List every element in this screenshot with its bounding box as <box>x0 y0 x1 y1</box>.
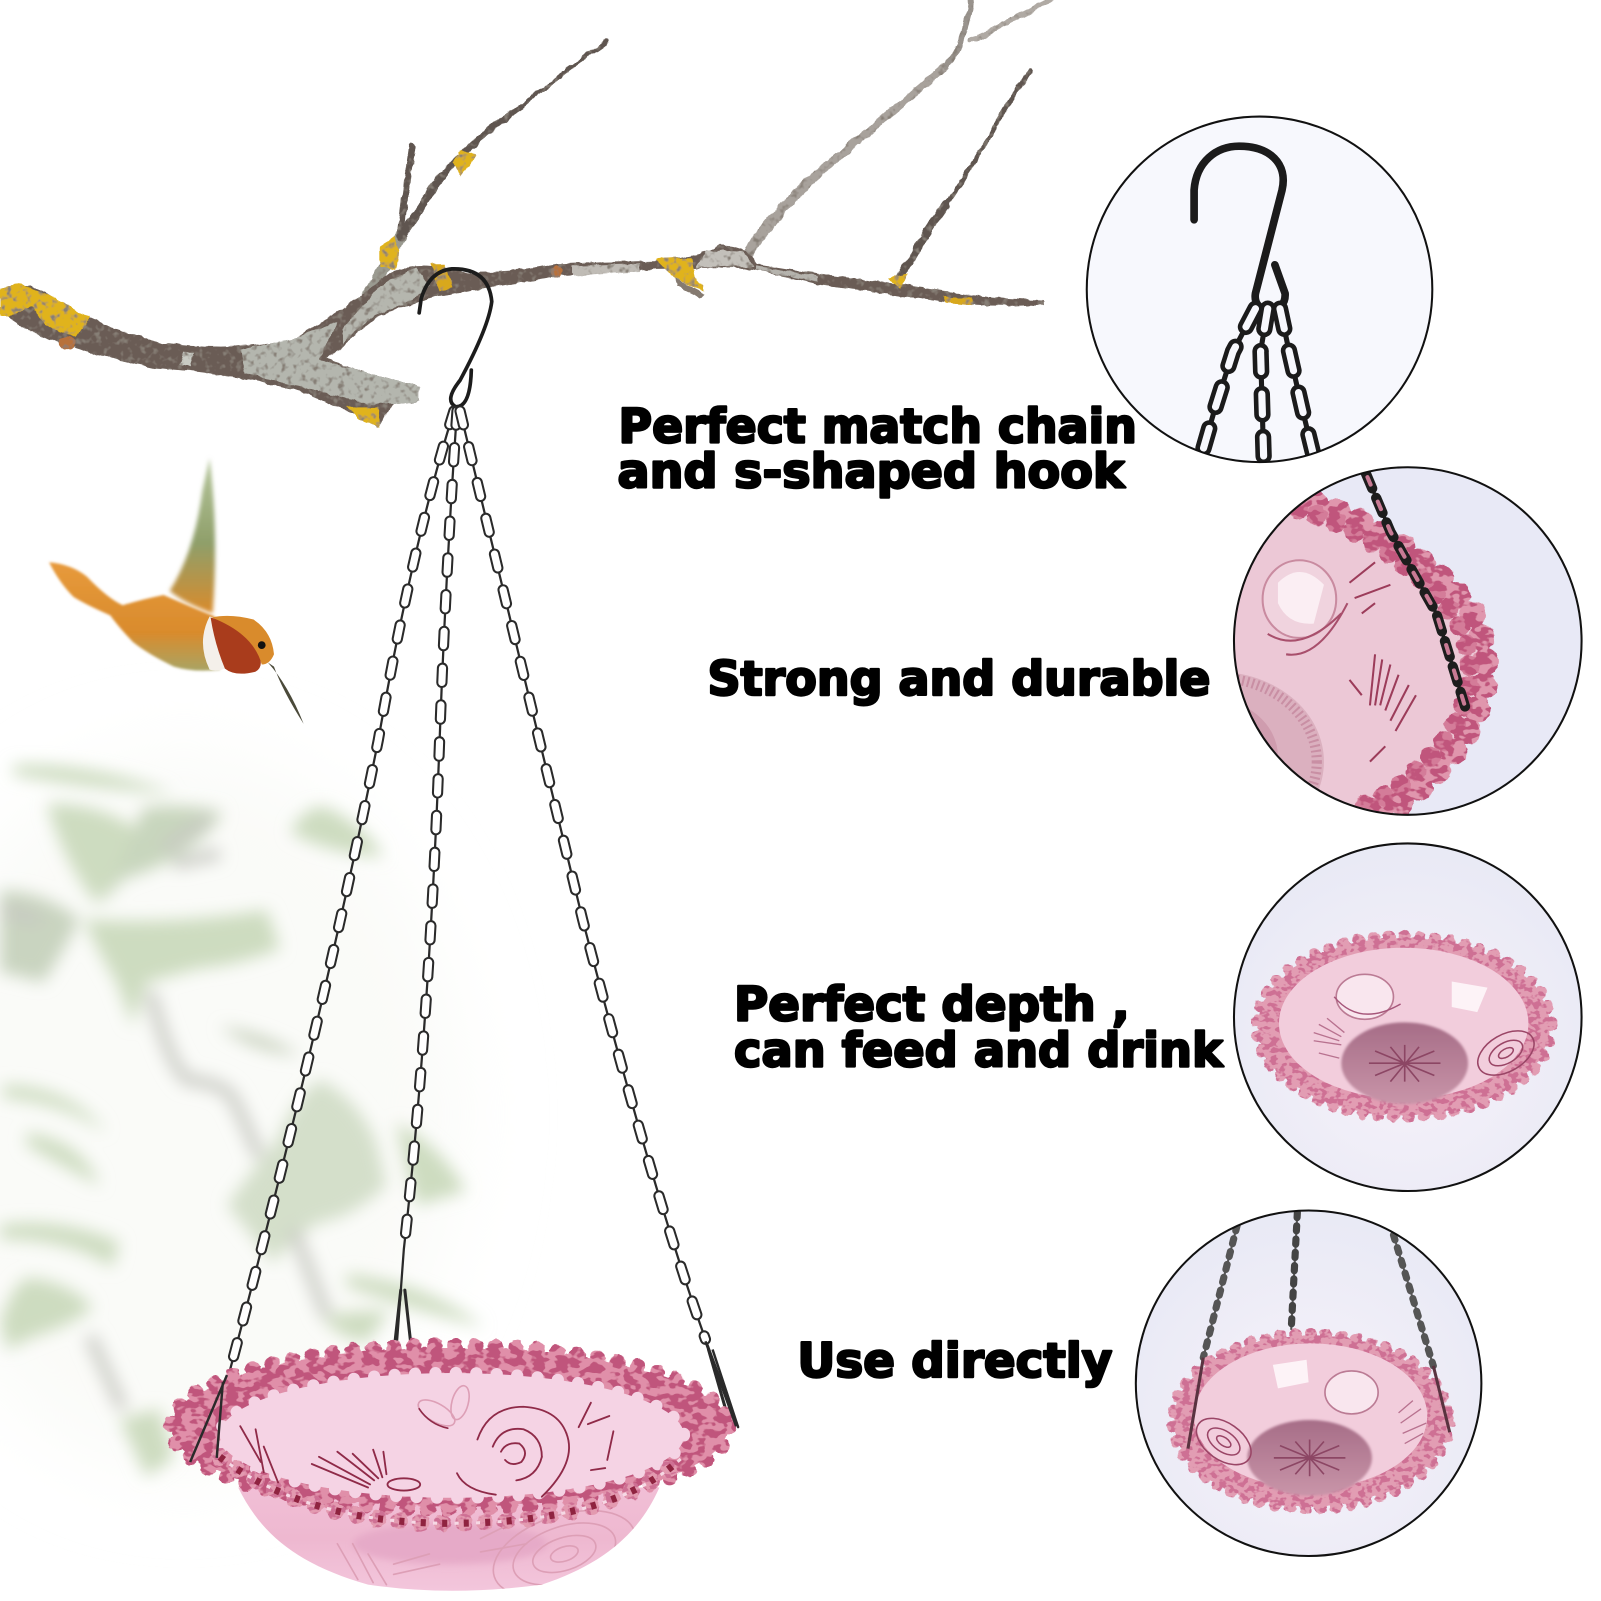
right chain <box>460 411 738 1431</box>
bubble rose <box>1336 974 1393 1019</box>
caption: perfect depth: can feed and drink <box>734 1023 1224 1078</box>
lichen yellow <box>0 284 90 337</box>
circle: hanging bowl <box>1136 1210 1481 1556</box>
middle chain <box>395 411 457 1346</box>
circle: bowl depth <box>1234 843 1582 1191</box>
pink glass <box>1235 514 1479 806</box>
bowl body <box>238 1488 659 1591</box>
white throat <box>203 616 225 670</box>
twigs <box>353 0 1051 319</box>
crown <box>212 616 274 665</box>
highlight <box>1452 981 1488 1012</box>
fan <box>1399 1401 1426 1444</box>
beak <box>268 662 304 724</box>
chains <box>1203 1213 1433 1366</box>
hanging chain <box>1366 473 1465 706</box>
blurred foliage background <box>0 757 484 1477</box>
rose bubble <box>1263 560 1336 638</box>
circle: s-hook detail <box>1087 117 1432 462</box>
star <box>1369 1045 1440 1082</box>
inner bowl <box>220 1373 684 1498</box>
body shadow <box>353 1523 547 1564</box>
rose engraving <box>457 1407 569 1497</box>
tulip engraving <box>579 1403 613 1470</box>
caption: strong and durable: Strong and durable <box>707 652 1210 707</box>
bowl rim <box>1256 936 1551 1116</box>
glass rim <box>171 1345 729 1509</box>
spiral rose <box>1476 1030 1535 1076</box>
leaf engraving <box>414 1384 472 1431</box>
beaded rim <box>1268 489 1486 823</box>
bowl base <box>1341 1022 1468 1104</box>
fan engraving <box>240 1426 420 1491</box>
star <box>1274 1439 1345 1476</box>
wing <box>170 458 215 613</box>
detail chains <box>1208 332 1310 430</box>
bowl base <box>1247 1420 1372 1496</box>
lichen grey <box>240 322 419 404</box>
trunk <box>0 245 1045 427</box>
highlight <box>1273 1360 1309 1388</box>
hummingbird <box>49 458 304 724</box>
tail and body <box>49 562 220 671</box>
bowl interior <box>1194 1343 1427 1489</box>
s-hook on branch <box>419 269 492 407</box>
caption: perfect match chain: Perfect match chain <box>619 400 1137 455</box>
left chain <box>190 411 454 1462</box>
caption: perfect depth: Perfect depth , <box>734 977 1130 1032</box>
tulip and fan engraving <box>1350 562 1416 762</box>
fan <box>1314 1018 1344 1058</box>
hook <box>1194 146 1285 311</box>
chain ends on rim <box>1188 1358 1450 1449</box>
bowl interior <box>1279 948 1528 1099</box>
red gorget <box>211 617 261 674</box>
front beads <box>220 1457 683 1523</box>
spiral rose <box>1196 1418 1252 1466</box>
base rings <box>1238 674 1324 789</box>
three hanging chains <box>190 411 738 1462</box>
bubble rose <box>1325 1371 1378 1414</box>
branch <box>0 0 1051 427</box>
main pink glass bowl <box>171 1341 738 1601</box>
caption: perfect match chain: and s-shaped hook <box>617 445 1126 500</box>
circle: rim close-up <box>1232 466 1583 816</box>
chain ends on rim <box>190 1375 227 1462</box>
bowl rim <box>1173 1334 1449 1508</box>
caption: use directly: Use directly <box>797 1334 1112 1389</box>
body embossing <box>336 1510 634 1589</box>
